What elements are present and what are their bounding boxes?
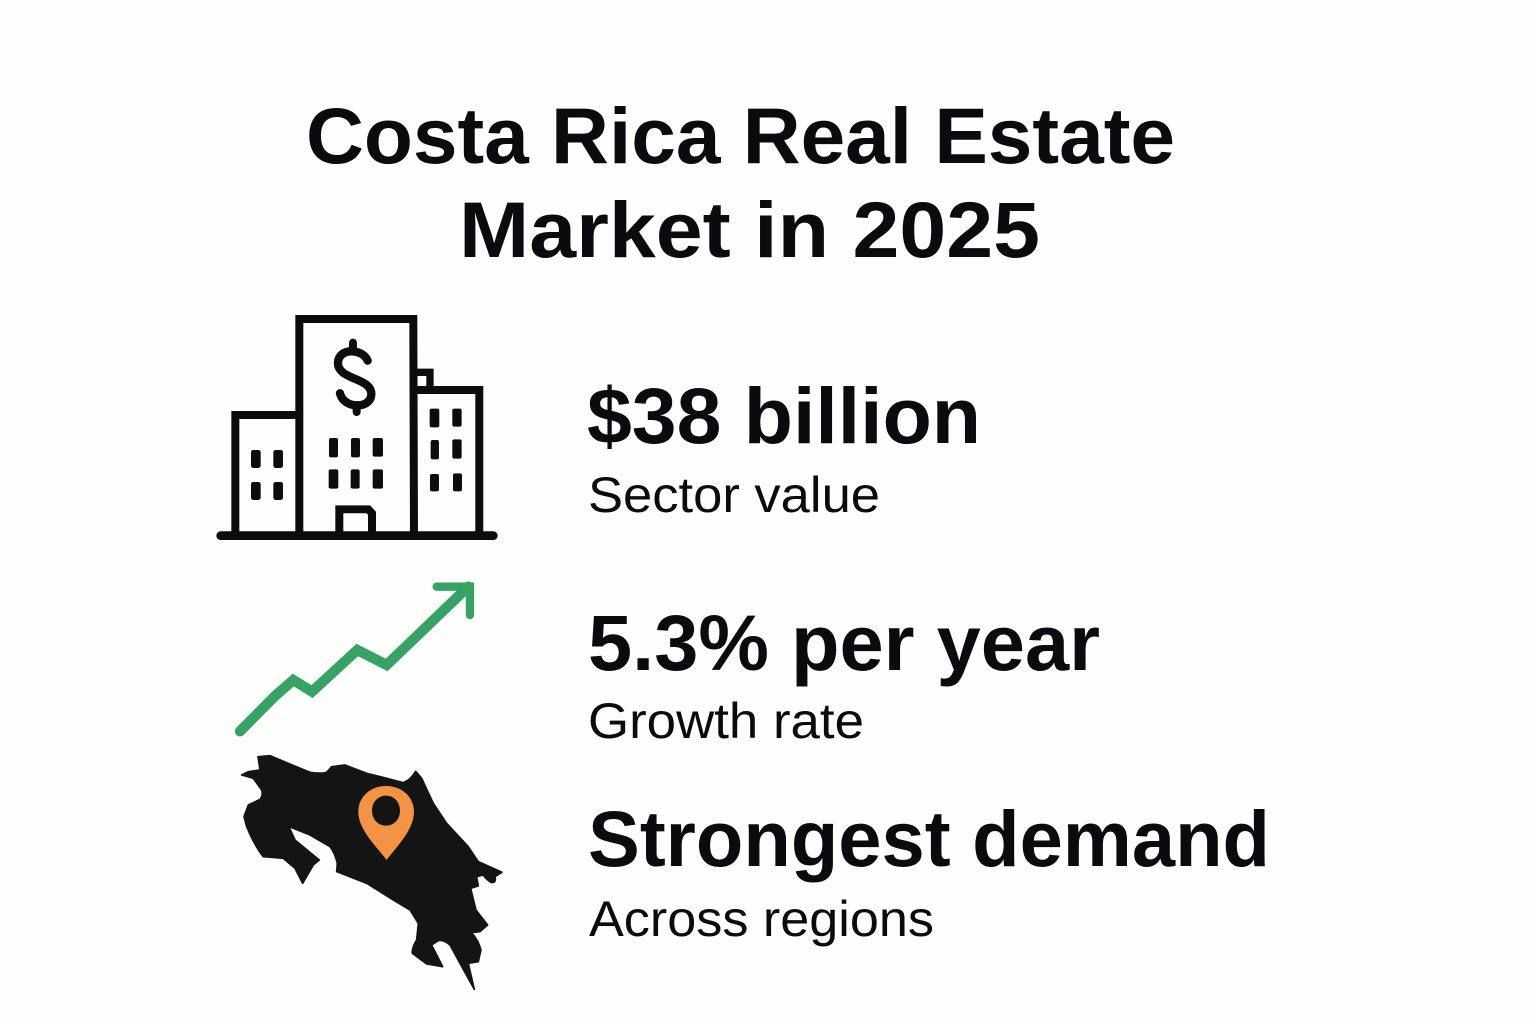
icon: Costa Rica map with location pin (242, 756, 502, 989)
title (306, 91, 1175, 274)
icon: green growth arrow (240, 587, 470, 731)
stat: strongest demand: Across regions (589, 891, 934, 947)
stat: sector value: Sector value (588, 467, 880, 523)
icon: office buildings with dollar sign (221, 319, 493, 536)
stat: growth rate: 5.3% per year (588, 598, 1100, 687)
title: Costa Rica Real Estate (306, 91, 1175, 180)
stat: sector value: $38 billion (587, 371, 981, 460)
location pin (358, 786, 414, 860)
stat: sector value (587, 371, 981, 523)
stat: strongest demand: Strongest demand (588, 794, 1270, 883)
stat: strongest demand (588, 794, 1270, 947)
stat: growth rate: Growth rate (588, 693, 864, 749)
map silhouette (242, 756, 502, 989)
stat: growth rate (588, 598, 1100, 749)
title: Market in 2025 (459, 185, 1040, 274)
